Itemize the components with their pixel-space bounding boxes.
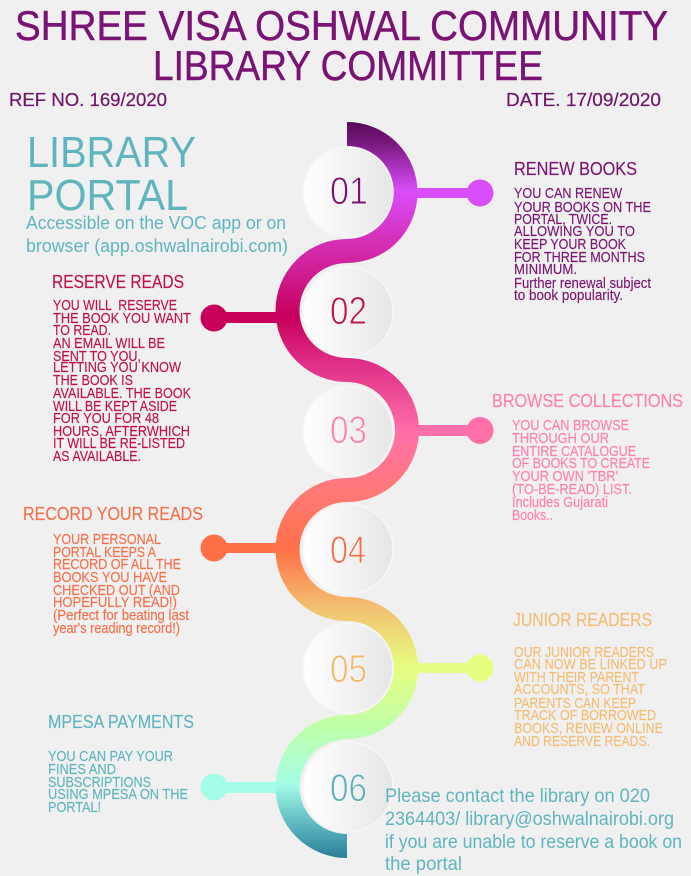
step disc 03: 03 [330, 409, 367, 452]
reference number: REF NO. 169/2020 [9, 89, 167, 110]
panel: mpesa payments: FINES AND [48, 762, 116, 778]
panel: renew books: ALLOWING YOU TO [514, 224, 635, 240]
panel: reserve reads: LETTING YOU KNOW [53, 360, 181, 376]
winding gradient ribbon [288, 134, 407, 846]
connector 6 [200, 774, 282, 800]
heading: library portal: PORTAL [27, 171, 188, 220]
panel: reserve reads: IT WILL BE RE-LISTED [53, 436, 185, 452]
heading: library portal: LIBRARY [27, 128, 196, 177]
panel: browse collections: Includes Gujarati [512, 495, 608, 511]
panel: mpesa payments [48, 711, 194, 816]
connector 4 [200, 534, 282, 562]
step disc 01 [303, 147, 393, 237]
step disc 02: 02 [330, 290, 367, 333]
panel: browse collections: (TO-BE-READ) LIST. [512, 482, 632, 498]
panel: junior readers: TRACK OF BORROWED [514, 708, 656, 724]
heading: library portal [27, 128, 196, 220]
panel: mpesa payments: PORTAL! [48, 800, 101, 816]
panel: record your reads: (Perfect for beating last [53, 608, 189, 624]
contact note: 2364403/ library@oshwalnairobi.org [385, 809, 674, 830]
panel: junior readers: OUR JUNIOR READERS [514, 645, 654, 661]
step disc 01: 01 [330, 170, 368, 213]
step disc 04: 04 [330, 529, 366, 572]
panel: browse collections: YOU CAN BROWSE [512, 418, 629, 434]
subtitle text: browser (app.oshwalnairobi.com) [26, 235, 288, 256]
panel: browse collections: THROUGH OUR [512, 431, 609, 447]
panel: reserve reads: THE BOOK IS [53, 373, 133, 389]
step disc 05: 05 [330, 648, 367, 691]
panel: junior readers: WITH THEIR PARENT [514, 670, 639, 686]
connector 2 [200, 304, 282, 332]
connector 5 [412, 654, 494, 682]
panel: reserve reads: AVAILABLE. THE BOOK [53, 386, 191, 402]
panel: renew books: MINIMUM. [514, 262, 577, 278]
contact note [385, 786, 682, 875]
connector 1 [412, 180, 494, 206]
title [15, 2, 668, 89]
panel: reserve reads: FOR YOU FOR 48 [53, 411, 159, 427]
step disc 03 [303, 386, 393, 476]
panel: junior readers [513, 609, 667, 750]
panel: renew books: to book popularity. [514, 288, 623, 304]
panel: junior readers: BOOKS, RENEW ONLINE [514, 721, 663, 737]
panel: renew books: Further renewal subject [514, 276, 651, 292]
panel: record your reads: PORTAL KEEPS A [53, 545, 156, 561]
panel: reserve reads: AN EMAIL WILL BE [53, 336, 165, 352]
panel: reserve reads: YOU WILL RESERVE [53, 298, 177, 314]
panel: browse collections: YOUR OWN 'TBR' [512, 469, 618, 485]
panel: junior readers: JUNIOR READERS [513, 609, 652, 630]
contact note: Please contact the library on 020 [385, 786, 650, 807]
panel: renew books [514, 158, 651, 304]
panel: record your reads: year's reading record!) [53, 621, 180, 637]
panel: renew books: YOU CAN RENEW [514, 186, 622, 202]
panel: junior readers: AND RESERVE READS. [514, 734, 650, 750]
panel: record your reads: BOOKS YOU HAVE [53, 570, 167, 586]
contact note: the portal [385, 854, 462, 875]
panel: reserve reads: SENT TO YOU, [53, 349, 141, 365]
panel: mpesa payments: USING MPESA ON THE [48, 787, 188, 803]
panel: mpesa payments: SUBSCRIPTIONS [48, 775, 151, 791]
panel: record your reads: HOPEFULLY READ!) [53, 595, 177, 611]
panel: junior readers: CAN NOW BE LINKED UP [514, 657, 667, 673]
panel: mpesa payments: YOU CAN PAY YOUR [48, 749, 173, 765]
panel: reserve reads [52, 271, 191, 465]
panel: renew books: PORTAL, TWICE. [514, 212, 612, 228]
step disc 06 [303, 742, 393, 832]
step disc 05 [303, 623, 393, 713]
panel: reserve reads: THE BOOK YOU WANT [53, 311, 191, 327]
panel: browse collections: OF BOOKS TO CREATE [512, 456, 650, 472]
panel: reserve reads: TO READ. [53, 323, 111, 339]
panel: renew books: YOUR BOOKS ON THE [514, 200, 651, 216]
title: LIBRARY COMMITTEE [153, 42, 543, 89]
subtitle text: Accessible on the VOC app or on [26, 212, 286, 233]
panel: renew books: RENEW BOOKS [514, 158, 637, 179]
date: DATE. 17/09/2020 [506, 89, 661, 110]
panel: record your reads [23, 503, 203, 637]
panel: reserve reads: RESERVE READS [52, 271, 184, 292]
panel: record your reads: RECORD OF ALL THE [53, 557, 181, 573]
panel: junior readers: ACCOUNTS, SO THAT [514, 682, 645, 698]
step disc 06: 06 [330, 767, 367, 810]
panel: reserve reads: WILL BE KEPT ASIDE [53, 399, 177, 415]
panel: junior readers: PARENTS CAN KEEP [514, 696, 636, 712]
panel: reserve reads: HOURS, AFTERWHICH [53, 424, 190, 440]
connector 3 [412, 417, 494, 444]
panel: browse collections [492, 390, 683, 524]
panel: record your reads: CHECKED OUT (AND [53, 583, 180, 599]
panel: renew books: KEEP YOUR BOOK [514, 237, 626, 253]
subtitle text [26, 212, 288, 256]
panel: record your reads: YOUR PERSONAL [53, 532, 161, 548]
panel: record your reads: RECORD YOUR READS [23, 503, 203, 524]
panel: reserve reads: AS AVAILABLE. [53, 449, 141, 465]
panel: mpesa payments: MPESA PAYMENTS [48, 711, 194, 732]
panel: browse collections: ENTIRE CATALOGUE [512, 444, 636, 460]
panel: browse collections: Books.. [512, 508, 553, 524]
step disc 04 [303, 504, 393, 594]
panel: renew books: FOR THREE MONTHS [514, 250, 645, 266]
step disc 02 [303, 267, 393, 357]
